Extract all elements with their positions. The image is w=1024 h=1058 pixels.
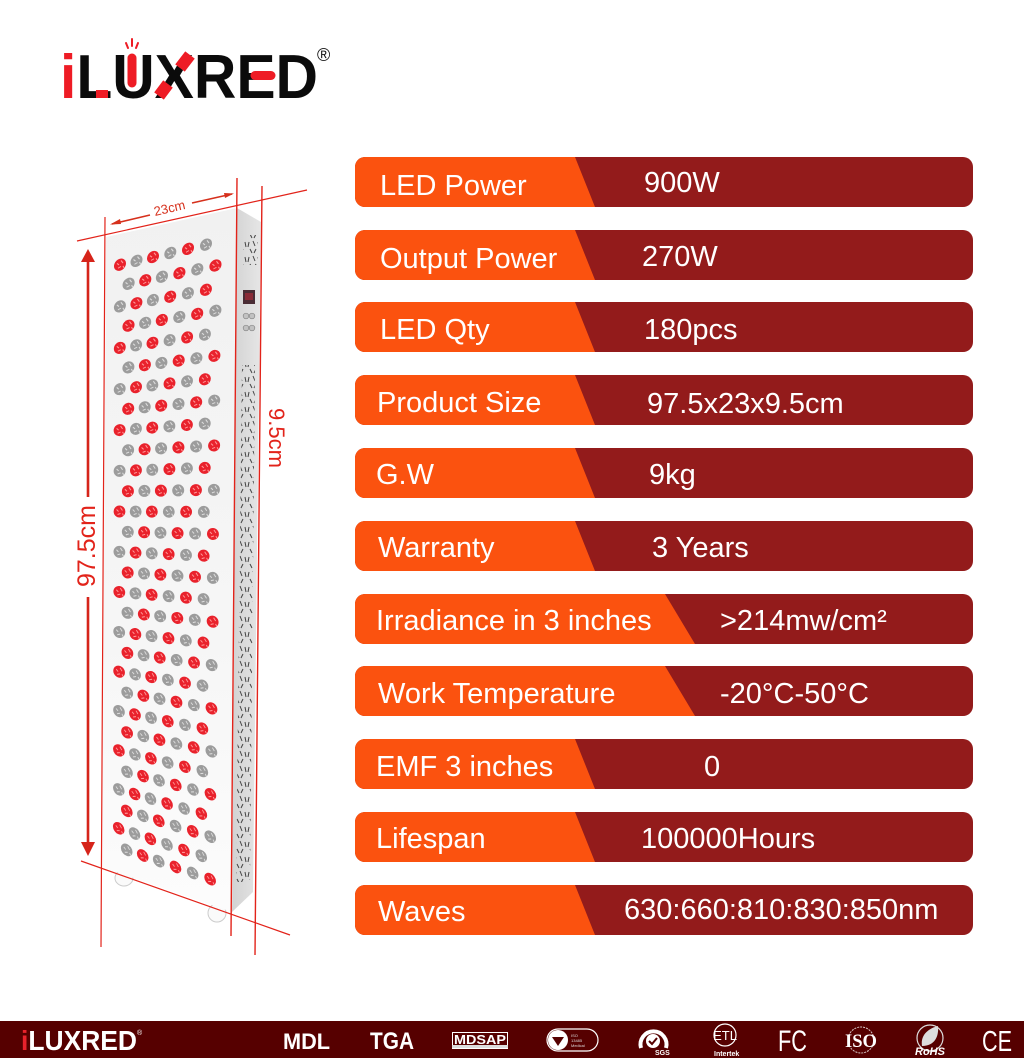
cert: ETL Intertek: ETL [713, 1028, 737, 1043]
spec row: LED Power [355, 157, 973, 207]
top side vent [243, 235, 258, 265]
cert: ISO 13485 oval: ISO [571, 1033, 578, 1038]
dimension lines [77, 178, 307, 955]
spec row: Product Size [355, 375, 973, 425]
cert: TGA: TGA [370, 1028, 414, 1055]
spec row: Irradiance in 3 inches: Irradiance in 3 inches [376, 605, 652, 637]
footer certification strip [0, 1021, 1024, 1058]
digital display [243, 290, 255, 304]
product panel illustration [102, 208, 261, 922]
spec row: EMF 3 inches [355, 739, 973, 789]
spec row: LED Power: LED Power [380, 170, 527, 202]
cert: ETL Intertek [713, 1024, 739, 1058]
panel feet [115, 870, 226, 922]
spec row: LED Power: 900W [644, 167, 720, 199]
cert: MDSAP: MDSAP [454, 1032, 506, 1047]
cert: RoHS: RoHS [915, 1046, 946, 1058]
spec row: Lifespan: Lifespan [376, 823, 486, 855]
spec row: Warranty [355, 521, 973, 571]
LED array [113, 237, 222, 887]
registered mark: ® [317, 45, 330, 65]
long side vent [236, 365, 255, 882]
spec row: Irradiance in 3 inches [355, 594, 973, 644]
cert: FC: FC [778, 1025, 807, 1058]
spec row: Lifespan [355, 812, 973, 862]
spec row: Work Temperature: Work Temperature [378, 678, 615, 710]
footer logo: iLUXRED [21, 1025, 137, 1056]
panel side face [232, 208, 261, 912]
spec row: Output Power [355, 230, 973, 280]
spec row: EMF 3 inches: EMF 3 inches [376, 751, 553, 783]
dimension: width 23cm [110, 193, 234, 224]
spec row: G.W: 9kg [649, 459, 696, 491]
dimension: width 23cm: 23cm [152, 197, 187, 219]
spec row: Waves: 630:660:810:830:850nm [624, 894, 938, 926]
cert: ISO 13485 oval [547, 1029, 598, 1051]
spec row: LED Qty: LED Qty [380, 314, 490, 346]
footer logo: ® [137, 1029, 143, 1037]
spec row: Output Power: Output Power [380, 243, 558, 275]
spec row: Warranty: Warranty [378, 532, 495, 564]
cert: CE: CE [982, 1026, 1012, 1058]
spec row: Output Power: 270W [642, 241, 718, 273]
spec row: Work Temperature [355, 666, 973, 716]
spec row: G.W [355, 448, 973, 498]
dimension: depth 9.5cm: 9.5cm [264, 408, 289, 468]
cert: ETL Intertek: Intertek [714, 1051, 739, 1058]
dimension: height 97.5cm [73, 249, 101, 856]
panel front face [102, 208, 237, 912]
cert: RoHS [915, 1025, 946, 1058]
spec row: Product Size: 97.5x23x9.5cm [647, 388, 844, 420]
spec row: G.W: G.W [376, 459, 435, 491]
spec row: Product Size: Product Size [377, 387, 541, 419]
spec row: LED Qty [355, 302, 973, 352]
cert: SGS: SGS [655, 1050, 670, 1057]
logo: iLUXRED: iLUXRED [60, 43, 318, 112]
icon: logo red accents [96, 39, 271, 96]
spec row: Warranty: 3 Years [652, 532, 749, 564]
spec row: Work Temperature: -20°C-50°C [720, 678, 869, 710]
spec row: EMF 3 inches: 0 [704, 751, 720, 783]
cert: MDL: MDL [283, 1029, 330, 1054]
cert: ISO: ISO [845, 1031, 877, 1052]
cert: ISO 13485 oval: 13485 [571, 1038, 583, 1043]
cert: SGS [640, 1031, 670, 1057]
spec row: Irradiance in 3 inches: >214mw/cm² [720, 605, 887, 637]
spec row: Waves [355, 885, 973, 935]
spec row: Lifespan: 100000Hours [641, 823, 815, 855]
control buttons [243, 313, 255, 331]
spec row: LED Qty: 180pcs [644, 314, 738, 346]
dimension: height 97.5cm: 97.5cm [73, 505, 101, 587]
cert: ISO 13485 oval: Medical [571, 1043, 585, 1048]
spec row: Waves: Waves [378, 896, 466, 928]
